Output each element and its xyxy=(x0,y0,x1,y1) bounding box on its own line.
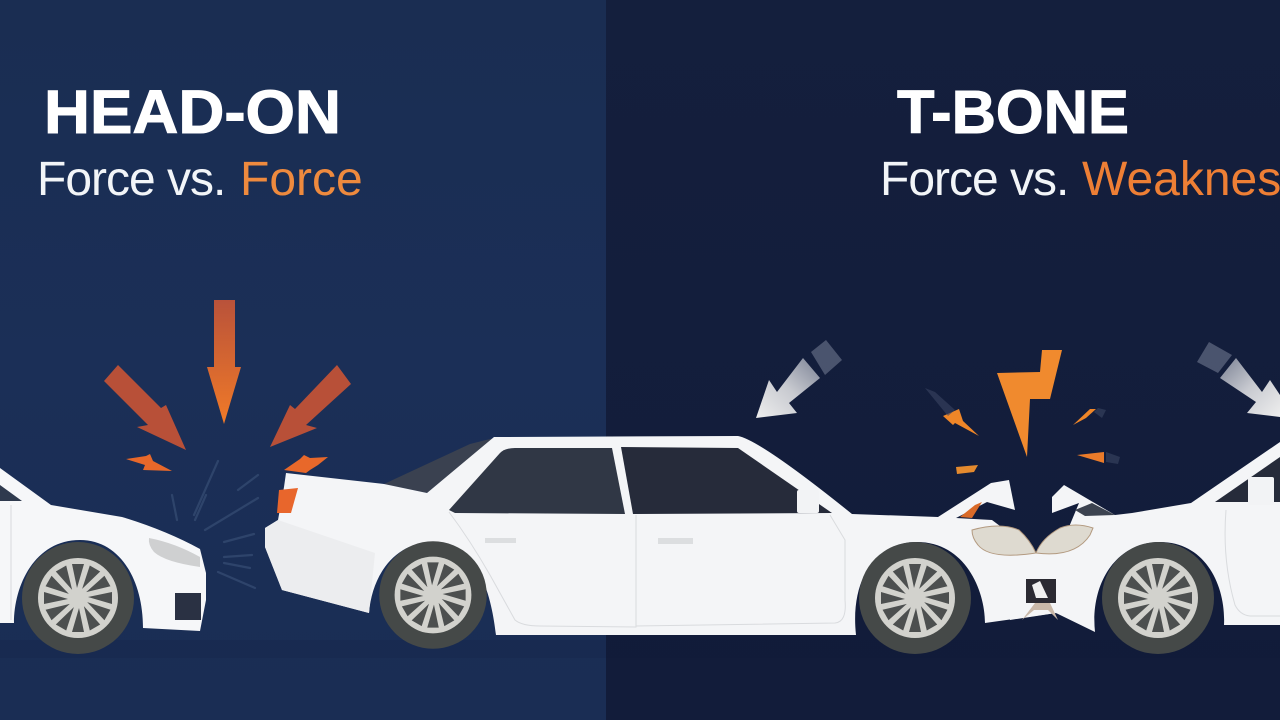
arrow: grey force from upper right xyxy=(1197,342,1280,417)
arrow: top down xyxy=(207,300,241,424)
right headlight xyxy=(1036,525,1093,554)
tail light xyxy=(277,488,298,513)
car body xyxy=(0,468,206,631)
door line xyxy=(10,505,12,620)
side mirror xyxy=(1248,477,1274,505)
rear window xyxy=(449,448,625,514)
car: right, colliding xyxy=(1000,442,1280,654)
panel: head-on background xyxy=(0,0,606,720)
door handle front xyxy=(658,538,693,544)
spark: right xyxy=(284,455,328,473)
car body xyxy=(1020,442,1280,632)
side mirror xyxy=(797,490,819,513)
icon: head-on force arrows xyxy=(104,300,351,473)
front window xyxy=(621,447,832,514)
headlight xyxy=(149,538,200,567)
subheading: Force vs. Weakness: Force vs. xyxy=(880,153,1068,206)
subheading: Force vs. Force: Force xyxy=(240,153,363,206)
car: left, head-on xyxy=(0,468,206,654)
subheading: Force vs. Force: Force vs. xyxy=(37,153,225,206)
heading: T-BONE: T-BONE xyxy=(897,78,1129,146)
arrow body xyxy=(756,358,820,418)
ground shadow xyxy=(0,640,1280,658)
arrow: grey force from upper left xyxy=(756,340,842,418)
main lightning bolt xyxy=(997,350,1062,457)
arrow tail band xyxy=(1197,342,1232,373)
arrow: from upper right xyxy=(270,365,351,447)
icon: t-bone impact bolts xyxy=(925,350,1120,474)
rear bumper shade xyxy=(265,520,375,613)
hood gap xyxy=(1075,503,1115,516)
faded bolt trails xyxy=(925,388,1120,464)
front wheel xyxy=(22,542,134,654)
left headlight xyxy=(972,526,1036,555)
rear wheel xyxy=(379,541,487,649)
small bolt lower left xyxy=(956,465,978,474)
rear window wedge xyxy=(384,438,494,493)
front wheel xyxy=(1102,542,1214,654)
car: center, crashing on both ends xyxy=(265,436,1075,654)
arrow tail band xyxy=(811,340,842,375)
panel: t-bone background xyxy=(606,0,1280,720)
small bolt lower right xyxy=(1077,452,1104,463)
arrow body xyxy=(1220,358,1280,417)
door seams xyxy=(449,512,845,627)
car body xyxy=(265,436,1075,635)
impact streaks: head-on xyxy=(172,461,258,588)
left body join xyxy=(1000,553,1080,620)
grille xyxy=(175,593,201,620)
arrow: from upper left xyxy=(104,365,186,450)
side window xyxy=(0,485,22,501)
front wheel xyxy=(859,542,971,654)
small bolt upper right xyxy=(1073,409,1096,425)
door seam xyxy=(1225,510,1280,616)
bumper damage xyxy=(1022,579,1058,620)
door handle rear xyxy=(485,538,516,543)
spark: left xyxy=(126,454,172,471)
small bolt upper left xyxy=(943,409,979,436)
hood damage xyxy=(960,502,982,518)
window xyxy=(1215,457,1280,502)
heading: HEAD-ON: HEAD-ON xyxy=(44,78,341,146)
